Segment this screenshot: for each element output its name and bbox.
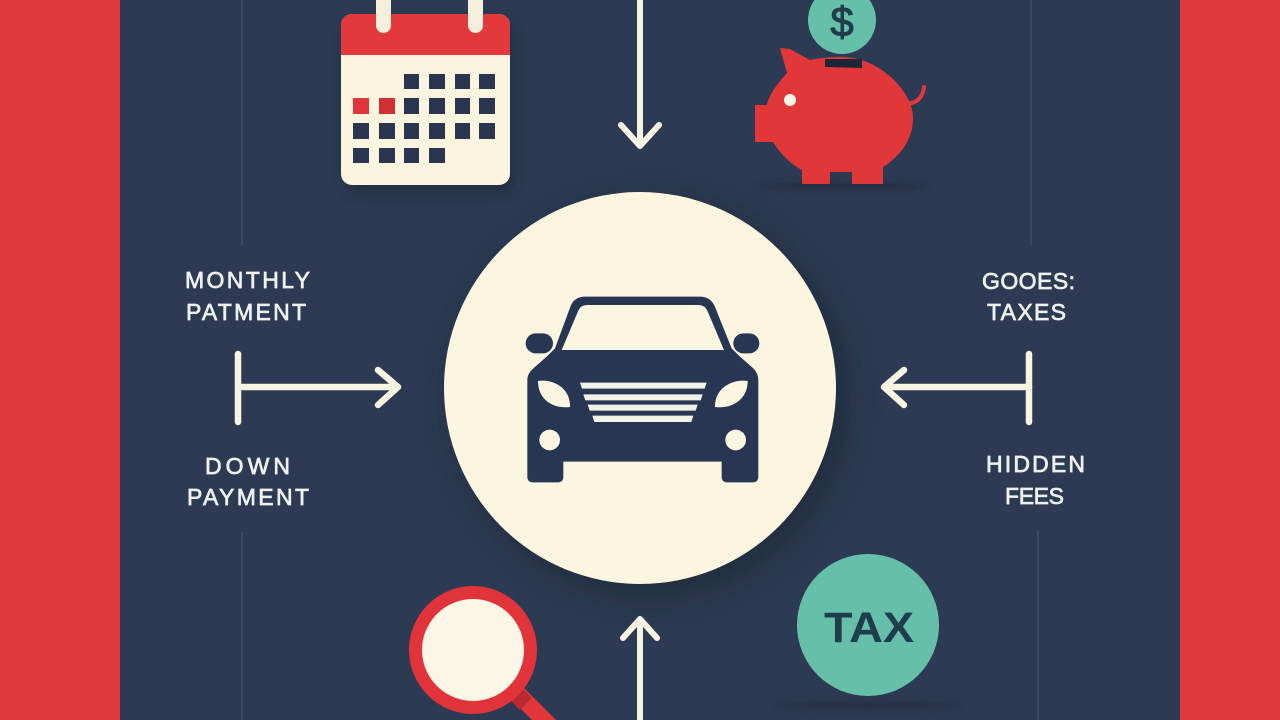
left red band — [0, 0, 120, 720]
label: goods taxes: GOOES: — [982, 268, 1075, 294]
label: down payment: PAYMENT — [187, 484, 309, 510]
label: monthly payment: PATMENT — [186, 299, 306, 325]
label: monthly payment — [185, 267, 310, 325]
icon: calendar — [341, 0, 514, 193]
arrow: bottom up arrow — [623, 619, 657, 720]
label: down payment: DOWN — [205, 453, 290, 479]
icon: piggy bank with coin — [754, 0, 930, 190]
arrow: left arrow into circle — [238, 354, 398, 422]
label: monthly payment: MONTHLY — [185, 267, 310, 293]
label: goods taxes: TAXES — [987, 299, 1066, 325]
coin — [808, 0, 876, 54]
label: goods taxes — [982, 268, 1075, 325]
central circle with car — [444, 192, 850, 598]
label: hidden fees: HIDDEN — [986, 451, 1085, 477]
right red band — [1180, 0, 1280, 720]
icon: magnifying glass — [416, 592, 552, 720]
label: down payment — [187, 453, 309, 510]
label: hidden fees — [986, 451, 1085, 509]
arrow: right arrow into circle — [884, 354, 1029, 422]
arrow: top down arrow — [621, 0, 659, 146]
label: hidden fees: FEES — [1005, 483, 1064, 509]
icon: car — [526, 297, 759, 482]
icon: tax circle — [776, 554, 960, 709]
icon: tax circle: TAX — [824, 604, 914, 652]
